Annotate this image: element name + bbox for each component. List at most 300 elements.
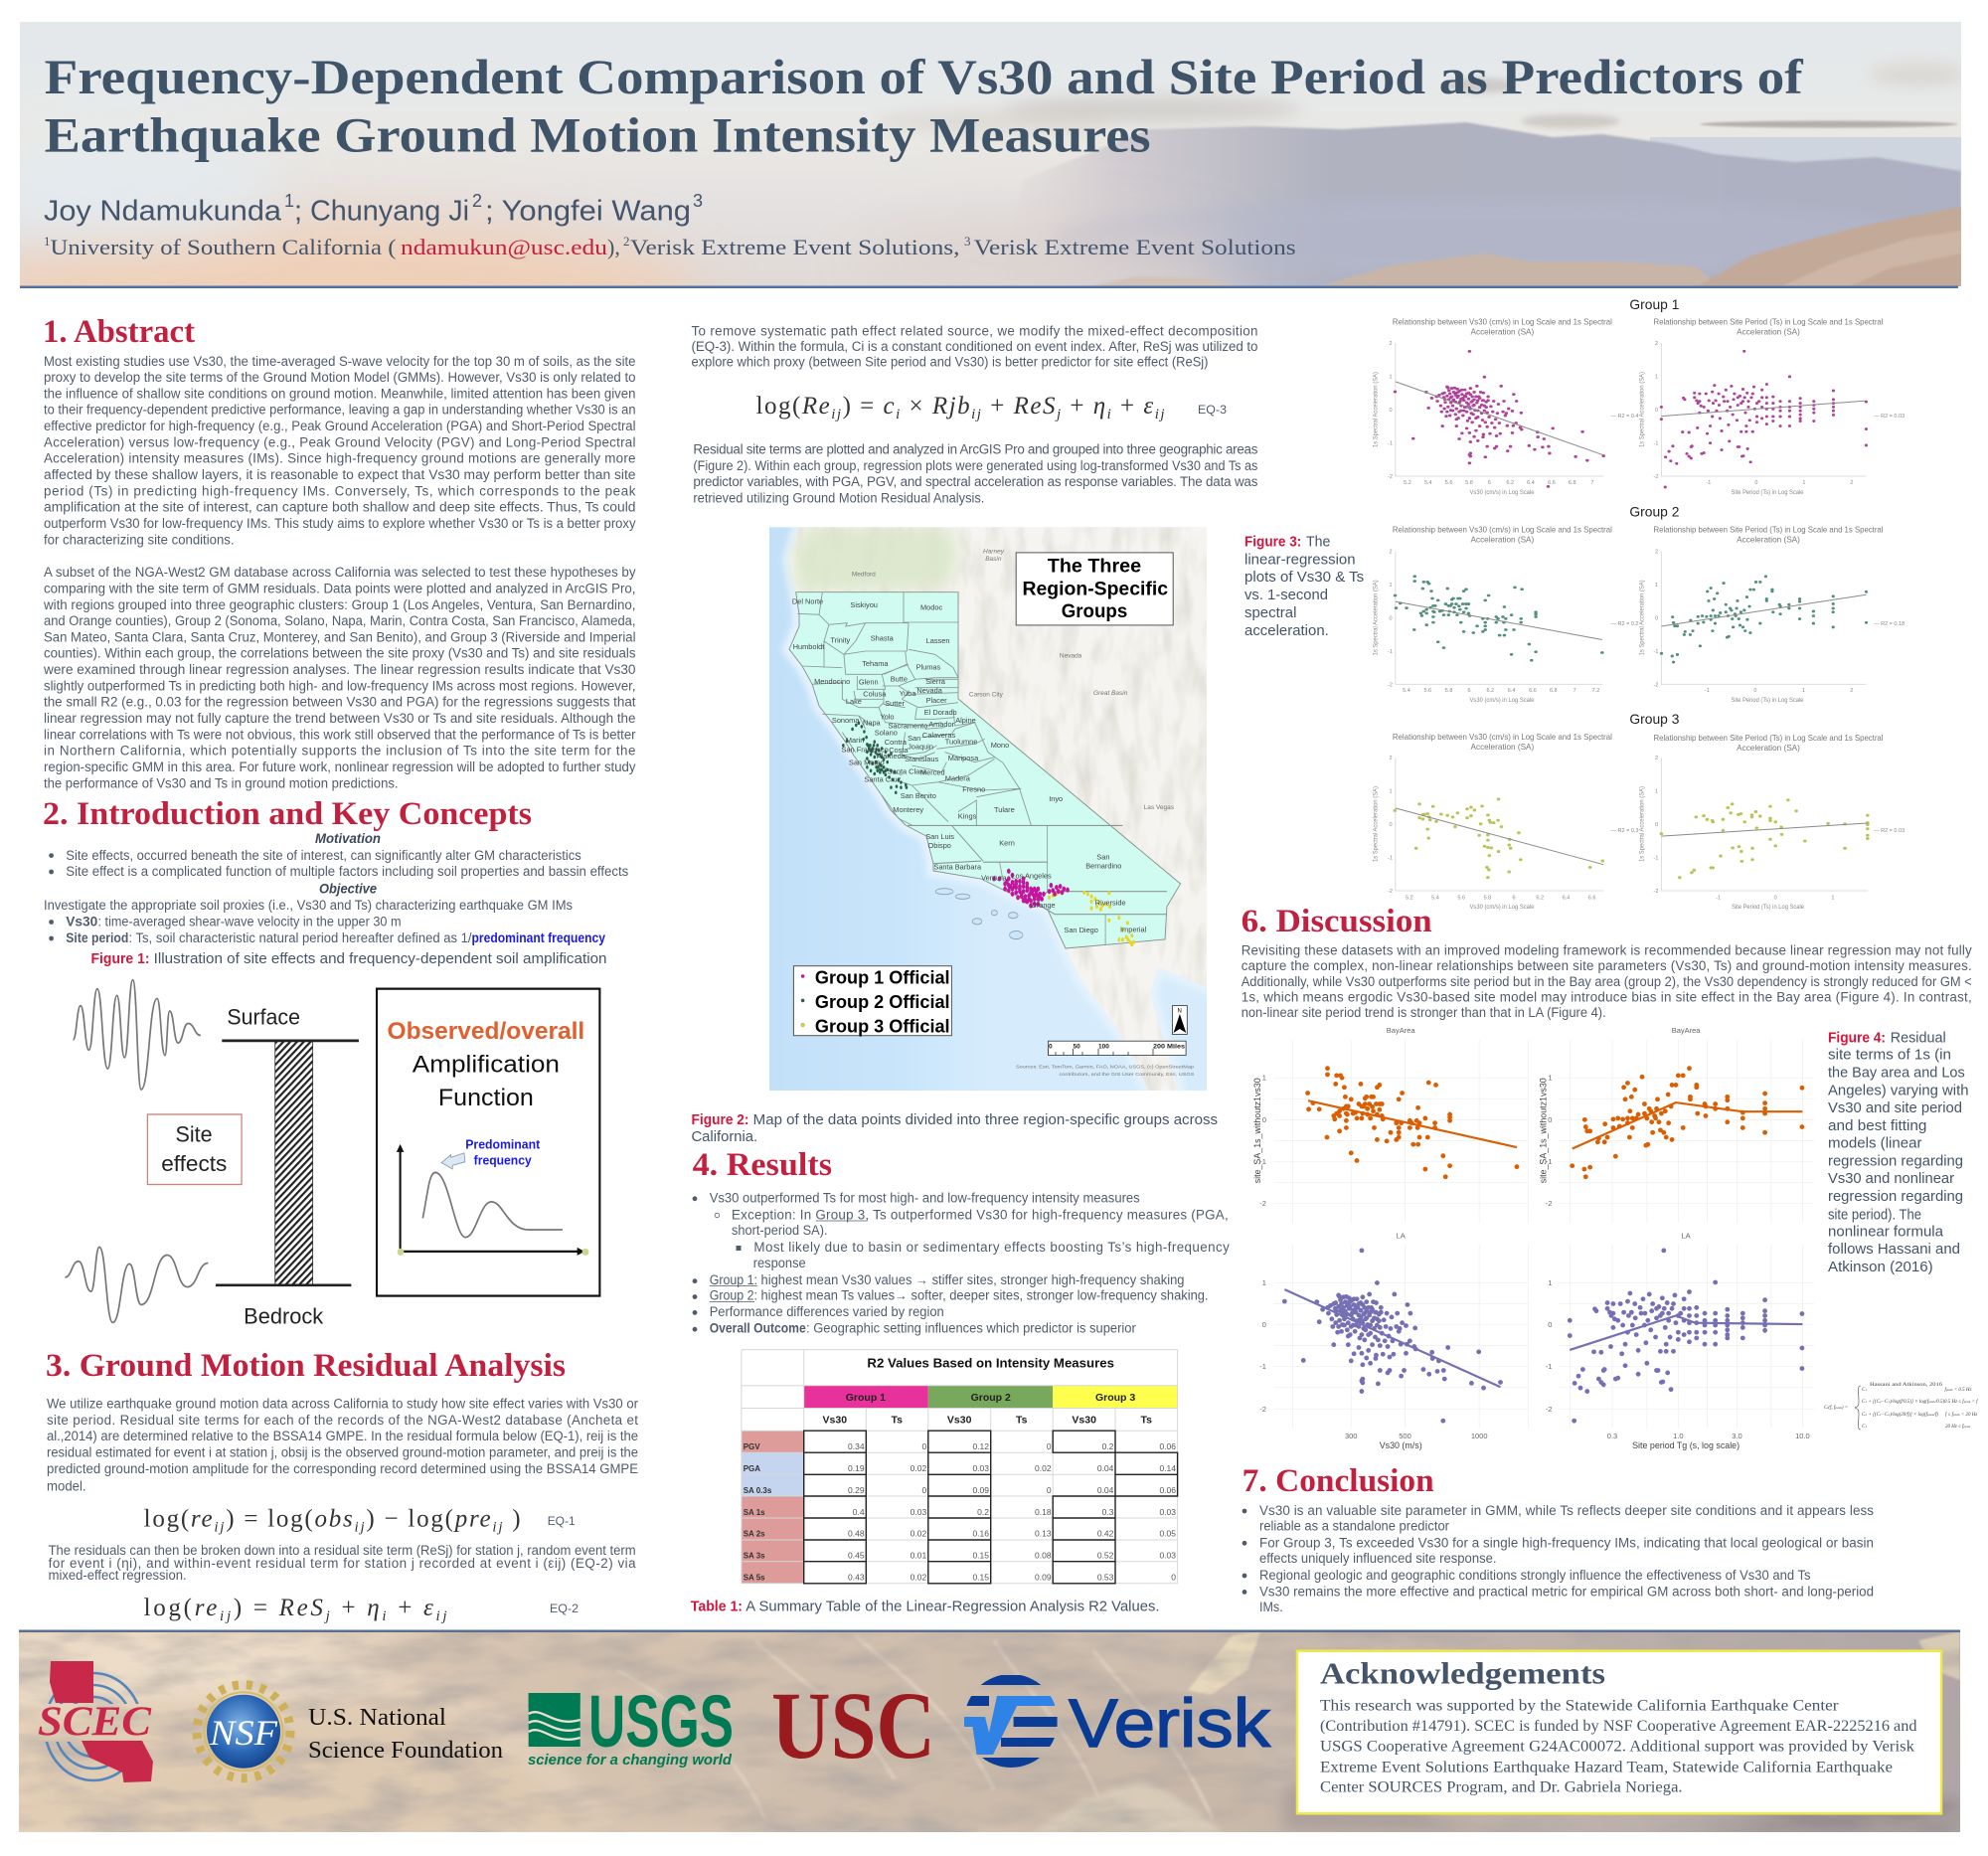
text block: results bullet list: short-period SA). [732,1223,827,1238]
map title box: Region-Specific [1022,579,1168,599]
equation 1: ) = log( [226,1506,313,1533]
logo: SCEC [38,1661,153,1782]
logo: NSF: Science Foundation [308,1738,503,1764]
affiliations: University of Southern California ( [50,235,396,259]
text block: conclusion bullets: reliable as a standalone predictor [1259,1519,1450,1534]
authors: Joy Ndamukunda [44,196,282,228]
text block: results bullet list: : Geographic setting influences which predictor is superior [806,1320,1136,1335]
figure 4 axis labels: 300 [1345,1432,1357,1440]
authors [44,191,703,228]
figure 4 axis labels: site_SA_1s_withoutz1vs30 [1252,1078,1263,1183]
chart: group 3 vs30: Vs30 (cm/s) in Log Scale [1469,904,1535,911]
chart: group 3 vs30: 2 [1390,756,1393,761]
equation 3: EQ-3 [1198,403,1227,417]
text block: objective: : time-averaged shear-wave velocity in the upper 30 m [97,915,402,929]
caption: figure 3: spectral [1244,605,1296,621]
chart: group 1 site period [1638,318,1905,496]
map labels: San Francisco [841,745,889,754]
amplification function box: Function [438,1084,534,1110]
chart: group 3 vs30: — R2 = 0.3 [1610,828,1638,834]
header banner [20,22,1961,288]
table values: 0.13 [1035,1529,1052,1539]
text block: conclusion bullets: Vs30 remains the more effective and practical metric for empirical GM across both short- and long-period [1259,1584,1874,1599]
chart: group 1 vs30: 7 [1590,480,1594,486]
panel: abstract [43,314,636,790]
table values: 0.48 [848,1529,865,1539]
data points: group 2 [843,723,907,792]
panel: acknowledgements [1297,1651,1941,1813]
figure 4 axis labels [1252,1026,1810,1451]
caption: figure 3: plots of Vs30 & Ts [1244,570,1364,586]
chart: group 3 vs30: 6 [1512,896,1516,902]
map labels: Kern [999,838,1015,847]
map legend: Group 3 Official [815,1017,950,1037]
chart: group 3 vs30: 6.6 [1588,896,1595,902]
chart: group 1 vs30 [1372,318,1638,496]
map labels: Santa Clara [888,766,927,775]
chart: bay area site period [1573,1069,1802,1177]
map labels: Sacramento [889,722,927,730]
table row labels: PGV [744,1442,760,1451]
chart: group 3 vs30: 6.2 [1536,896,1544,902]
equation 3: ij [1155,407,1165,422]
authors: 3 [693,191,703,211]
figure 4 axis labels: Vs30 (m/s) [1380,1440,1422,1451]
table values: 0.02 [911,1463,926,1473]
title: Frequency-Dependent Comparison of Vs30 and Site Period as Predictors of [45,49,1804,104]
chart: group 2 site period: — R2 = 0.18 [1874,621,1905,627]
map labels: San [1096,853,1109,862]
chart: group 1 vs30: Acceleration (SA) [1471,328,1535,336]
caption: figure 4: Vs30 and site period [1828,1100,1962,1116]
figure 4: residual site terms [1252,1026,1814,1451]
caption: figure 3 [1244,535,1364,639]
logo: Verisk: Verisk [1069,1685,1271,1762]
equation 3: + [1063,393,1091,420]
text block: conclusion bullets: For Group 3, Ts exceeded Vs30 for a single high-frequency IMs, indicating that local geological or basin [1259,1535,1874,1550]
county boundaries [797,592,1031,825]
figure 4 axis labels: -1 [1546,1157,1552,1166]
figure 4 axis labels: 0 [1548,1320,1552,1329]
table group headers: Group 2 [971,1392,1011,1404]
figure 4 axis labels: site_SA_1s_withoutz1vs30 [1539,1078,1549,1183]
map labels: Glenn [859,678,879,687]
text block: abstract paragraph 2: linear regression may not fully capture the trend between Vs30 or Ts and site residuals. Although the [44,711,636,726]
logo: USGS: USGS [588,1680,734,1763]
chart: group 3 site period: -1 [1716,896,1721,902]
logo: NSF: U.S. National [308,1705,446,1731]
affiliations: Verisk Extreme Event Solutions [974,235,1296,259]
chart: group 2 vs30: Vs30 (cm/s) in Log Scale [1469,697,1535,704]
text block: results bullet list: Overall Outcome [710,1320,806,1335]
map labels: Inyo [1049,794,1063,803]
chart: group 1 site period: 1 [1802,480,1805,486]
map labels: Nevada [1060,652,1082,660]
table group headers: Vs30 [947,1414,972,1426]
map labels: Colusa [863,689,887,698]
caption: figure 4 [1828,1030,1968,1275]
text block: discussion paragraph: Additionally, while Vs30 outperforms site period but in the Bay area (group 2), the Vs30 dependency is strongly reduced for GM < [1242,974,1972,989]
affiliations: 3 [964,234,970,249]
nonlinear formula: fpeak < 0.5 Hz [1944,1388,1971,1393]
authors: ; Yongfei Wang [485,196,691,228]
map scale bar: 0 [1049,1044,1053,1050]
map labels: Modoc [920,603,942,612]
table values: 0 [1171,1572,1176,1582]
text block: grouping method [693,441,1258,505]
chart: group 3 vs30: 0 [1390,822,1393,828]
table values: 0.15 [972,1551,989,1561]
table values: 0.01 [911,1551,926,1561]
logo: USGS [528,1680,734,1769]
text block: conclusion bullets: Regional geologic and geographic conditions strongly influence the effectiveness of Vs30 and Ts [1259,1568,1811,1583]
map scale bar: 50 [1074,1044,1080,1050]
table values: 0.43 [848,1572,865,1582]
chart: group 2 site period: 0 [1655,616,1658,622]
text block: decomposition [49,1543,636,1583]
text block: residual description: residual estimated for event i at station j, obsij is the observed ground-motion parameter, and preij is the [47,1445,638,1459]
text block: grouping method: Residual site terms are plotted and analyzed in ArcGIS Pro and grouped into three geographic areas [693,441,1258,456]
chart: group 1 site period: 2 [1850,480,1853,486]
equation 2: j [324,1608,330,1624]
soil column: Bedrock [244,1303,323,1329]
chart: group 2 site period [1638,525,1905,704]
table values: 0.19 [848,1463,865,1473]
nonlinear formula: C1 [1862,1425,1867,1430]
equation 3: c [884,393,895,420]
equation 3: log(Re [756,393,830,420]
caption: figure 4: regression regarding [1828,1154,1963,1170]
wave: bedrock motion [65,1247,208,1322]
affiliations: Verisk Extreme Event Solutions, [630,235,960,259]
equation 2: ij [220,1608,231,1624]
map labels: Harney [983,548,1005,555]
text block: abstract paragraph 1: amplification at the site of interest, can capture both shallow and deep site effects. Thus, Ts could [44,500,636,515]
equation 1 [144,1506,576,1536]
table group headers: Group 3 [1095,1392,1135,1404]
chart: group 3 vs30: 5.8 [1484,896,1491,902]
map labels: Amador [928,720,955,729]
table row labels: SA 0.3s [744,1486,772,1495]
text block: path effect [692,324,1258,370]
table values: 0.53 [1097,1572,1114,1582]
chart: group 2 vs30: -2 [1388,682,1393,688]
map labels: Sonoma [832,716,860,725]
chart: group 2 vs30: -1 [1388,649,1393,655]
map scale bar: 200 Miles [1153,1044,1185,1050]
chart: group 2 site period: Acceleration (SA) [1737,535,1800,545]
figure 4 axis labels: 1000 [1471,1432,1488,1440]
soil column: Surface [227,1004,300,1029]
authors: 2 [472,191,482,211]
footer banner [0,1625,1960,1832]
heading: introduction: 2. Introduction and Key Concepts [43,796,532,832]
equation 2: + [389,1595,420,1621]
map labels: Orange [1031,901,1056,910]
table values: 0.4 [853,1507,865,1517]
table values: 0 [921,1485,926,1495]
chart: group 2 site period: 1s Spectral Acceleration (SA) [1638,580,1646,655]
chart: group 3 vs30: 5.2 [1406,896,1413,902]
panel: mixed-effect decomposition [692,324,1258,505]
table group headers: Ts [1140,1414,1152,1426]
chart: group 3 vs30: 6.4 [1563,896,1570,902]
map labels: San [908,734,920,743]
text block: abstract paragraph 2 [43,565,636,790]
chart: group 2 vs30: Relationship between Vs30 (cm/s) in Log Scale and 1s Spectral [1393,525,1612,534]
map labels: Santa Cruz [864,775,902,783]
logo: Verisk [959,1675,1271,1768]
site effects box [147,1114,242,1185]
map labels: Stanislaus [905,755,939,763]
map labels: Tehama [862,659,889,668]
figure 4 axis labels: 3.0 [1732,1432,1742,1440]
text block: abstract paragraph 2: counties). Within each group, the correlations between the site proxy (Vs30 and Ts) and site residuals [44,646,636,661]
figure 4 axis labels: -2 [1259,1405,1266,1414]
caption: figure 4: Atkinson (2016) [1828,1260,1933,1275]
chart: group 1 site period: Site Period (Ts) in Log Scale [1732,489,1804,496]
equation 3: η [1093,393,1105,420]
figure 4 axis labels: 0 [1262,1115,1266,1124]
map labels: Siskiyou [850,600,878,609]
text block: abstract paragraph 2: comparing with the site term of GMM residuals. Data points were plotted and analyzed in ArcGIS Pro, [44,581,636,595]
chart: group 2 site period: 2 [1850,688,1853,694]
amplification function box: frequency [474,1153,532,1168]
text block: abstract paragraph 2: the performance of Vs30 and Ts in ground motion predictions. [44,775,398,790]
icon: north arrow [1173,1006,1187,1034]
table row labels: SA 1s [744,1508,765,1517]
figure 4 axis labels: 1 [1548,1074,1552,1083]
chart: group 1 vs30: 5.2 [1404,480,1411,486]
chart: group 3 vs30: 5.4 [1431,896,1439,902]
chart: la site period [1570,1251,1802,1421]
figure 4 axis labels: 1 [1262,1074,1266,1083]
panel: acknowledgements: Extreme Event Solutions Earthquake Hazard Team, Statewide California Earthquake [1320,1759,1893,1775]
panel: ground motion residual analysis [46,1348,639,1624]
map labels: Bernardino [1085,861,1121,870]
caption: figure 4: Vs30 and nonlinear [1828,1171,1954,1187]
title [45,49,1804,163]
heading: results: 4. Results [693,1147,832,1183]
figure 2: california map [769,527,1207,1091]
map labels: Napa [863,718,882,727]
text block: abstract paragraph 1: effective predictor for high-frequency (e.g., Peak Ground Acceleration (PGA) and Short-Period Spectral [44,419,636,433]
chart: group 2 vs30: 5.4 [1403,688,1410,694]
data points: group 1 [994,871,1068,906]
table values: 0.3 [1102,1507,1114,1517]
panel: discussion [1242,904,1972,1020]
table values: 0.03 [972,1463,989,1473]
text block: abstract paragraph 1: Most existing studies use Vs30, the time-averaged S-wave velocity for the top 30 m of soils, as the site [44,354,636,369]
map labels: Mariposa [948,754,979,762]
map labels: San Diego [1064,926,1098,934]
caption: figure 2: Map of the data points divided into three region-specific groups across [753,1112,1218,1128]
map labels: Trinity [830,636,851,645]
table group headers: Ts [892,1414,903,1426]
amplification function box: Observed/overall [388,1017,584,1044]
equation 1: ) [504,1506,521,1533]
table values: 0.06 [1159,1485,1176,1495]
text block: abstract paragraph 2: linear correlations with Ts were not obvious, this work still observed that the performance of Ts is better [44,727,636,742]
caption: figure 4: follows Hassani and [1828,1242,1960,1258]
chart: group 2 site period: 1 [1655,583,1658,589]
text block: grouping method: (Figure 2). Within each group, regression plots were generated using log-transformed Vs30 and Ts as [693,458,1258,473]
text block: discussion paragraph: Revisiting these datasets with an improved modeling framework is recommended because linear regression may not fully [1242,942,1972,957]
equation 3: ij [971,407,981,422]
table group headers: Vs30 [823,1414,847,1426]
chart: group 2 vs30 [1372,525,1638,704]
logo: USGS: science for a changing world [528,1753,733,1769]
chart: bay area vs30 [1308,1069,1517,1177]
chart: group 2 vs30: 1 [1390,583,1393,589]
chart: group 2 vs30: 7.2 [1592,688,1599,694]
chart: group 3 site period: -1 [1654,856,1658,862]
caption: table 1: A Summary Table of the Linear-Regression Analysis R2 Values. [746,1600,1159,1615]
logo: SCEC: SCEC [38,1700,152,1746]
text block: motivation [49,831,629,879]
chart: group 3 site period: 1 [1831,896,1834,902]
text block: abstract paragraph 2: were examined through linear regression analyses. The linear regression results indicate that Vs30 [43,662,636,677]
text block: results bullet list: response [753,1256,806,1270]
text block: abstract paragraph 1: the influence of shallow site conditions on ground motion. Meanwhile, limited attention has been given [44,386,636,401]
chart: group 2 vs30: 5.6 [1423,688,1431,694]
chart: group 3 site period: Site Period (Ts) in Log Scale [1732,904,1804,911]
text block: conclusion bullets: Vs30 is an valuable site parameter in GMM, while Ts reflects deeper site conditions and it appears less [1259,1503,1874,1518]
chart: group 1 vs30: 6 [1488,480,1491,486]
figure 4 axis labels: -2 [1546,1199,1552,1208]
text block: abstract paragraph 2: A subset of the NGA-West2 GM database across California was selected to test these hypotheses by [44,565,636,580]
map labels: San Mateo [849,759,885,767]
map legend [793,966,951,1037]
caption: figure 3: The [1306,535,1330,551]
chart: group 1 site period: Relationship between Site Period (Ts) in Log Scale and 1s Spectral [1654,318,1884,327]
chart: group 3 vs30: 5.6 [1457,896,1465,902]
caption: table 1: Table 1: [691,1600,743,1615]
map labels: Mono [991,741,1009,750]
map labels: El Dorado [924,708,957,717]
caption: figure 4: regression regarding [1828,1189,1963,1205]
heading: conclusion: 7. Conclusion [1242,1463,1434,1499]
caption: figure 4: the Bay area and Los [1828,1066,1965,1082]
map labels: Plumas [916,662,941,671]
map labels: Lake [846,697,862,706]
map labels: Merced [920,767,945,776]
table row labels: SA 3s [744,1552,765,1561]
figure 4 axis labels: 500 [1399,1432,1411,1440]
map labels: Humboldt [793,642,824,651]
text block: discussion paragraph: capture the complex, non-linear relationships between site parameters (Vs30, Ts) and ground-motion intensity measures. [1242,958,1972,973]
chart: group 2 vs30: 6.8 [1550,688,1558,694]
heading: abstract: 1. Abstract [43,314,195,350]
text block: residual description: model. [47,1479,86,1493]
chart: group 1 vs30: 5.6 [1445,480,1452,486]
nonlinear formula: 20 Hz ≤ fpeak [1945,1425,1971,1430]
chart: group 1 vs30: 6.8 [1569,480,1576,486]
authors: ; Chunyang Ji [294,196,469,228]
heading: discussion: 6. Discussion [1242,904,1432,939]
caption: figure 1: Illustration of site effects and frequency-dependent soil amplification [154,951,606,967]
caption: figure 4: site terms of 1s (in [1828,1048,1951,1064]
equation 1: log(re [144,1506,213,1533]
figure 4 axis labels: -2 [1546,1405,1552,1414]
equation 2: i [382,1608,387,1624]
chart: group 1 vs30: 1 [1390,375,1393,381]
text block: objective: Investigate the appropriate soil proxies (i.e., Vs30 and Ts) characterizing earthquake GM IMs [44,898,573,913]
map labels: Lassen [926,636,949,645]
map labels: Butte [891,674,908,684]
text block: objective [44,881,605,945]
map labels: Solano [875,729,898,738]
text block: motivation: Site effects, occurred beneath the site of interest, can significantly alter GM characteristics [66,848,581,863]
logo: NSF: NSF [209,1713,278,1753]
map labels: Riverside [1095,899,1126,907]
chart: group 1 site period: 2 [1655,341,1658,347]
chart: group 1 vs30: 6.6 [1548,480,1556,486]
equation 3: ) = [843,393,882,420]
chart: group 1 site period: -2 [1654,474,1658,480]
figure 4 axis labels: BayArea [1387,1026,1415,1035]
table highlighted cells [804,1431,1178,1584]
equation 2: ε [423,1595,433,1621]
icon: north arrow: N [1177,1008,1182,1014]
panel: acknowledgements: Center SOURCES Program, and Dr. Gabriela Noriega. [1320,1778,1683,1795]
caption: figure 4: Figure 4: [1828,1030,1886,1046]
chart: group 1 vs30: 6.2 [1506,480,1514,486]
text block: results bullet list: Performance differences varied by region [710,1304,944,1319]
text block: abstract paragraph 2: the small R2 (e.g., 0.03 for the regression between Vs30 and PGA) for the regressions suggests that [44,695,636,710]
figure 4 axis labels: 1 [1548,1278,1552,1287]
table values: 0.04 [1097,1463,1114,1473]
table values: 0.2 [1102,1441,1114,1451]
map title box [1016,553,1173,625]
panel: acknowledgements: This research was supported by the Statewide California Earthquake Center [1320,1698,1839,1715]
chart: group 3 site period: 2 [1655,756,1658,761]
text block: results bullet list: highest mean Ts values→ softer, deeper sites, stronger low-frequency shaking. [761,1288,1209,1303]
text block: results bullet list: Group 1: [710,1272,757,1287]
heading: residual analysis: 3. Ground Motion Residual Analysis [46,1348,566,1384]
table group headers: Vs30 [1072,1414,1096,1426]
map labels: Mendocino [814,677,850,686]
table values: 0.15 [972,1572,989,1582]
chart: group 1 site period: -1 [1654,441,1658,447]
chart: group 3 vs30: Acceleration (SA) [1471,743,1535,752]
site effects box: Site [176,1121,213,1147]
text block: abstract paragraph 2: region-specific GMM in this area. For future work, nonlinear regression will be adopted to further study [44,759,636,774]
map labels: Placer [926,696,947,705]
chart: group 3 site period: 1 [1655,789,1658,795]
figure 4 axis labels: -1 [1259,1157,1266,1166]
table group headers: Ts [1016,1414,1028,1426]
figure 1: site effects diagram [65,980,599,1329]
figure 4 axis labels: Site period Tg (s, log scale) [1632,1440,1740,1451]
chart: group 2 vs30: 6.2 [1486,688,1494,694]
text block: results bullet list: Exception: In Group 3, Ts outperformed Vs30 for high-frequency measures (PGA, [732,1207,1229,1222]
caption: figure 2 [692,1112,1218,1145]
amplification function box: Predominant [465,1137,540,1151]
nonlinear formula: C2 + [(C1−C2)/log(20/f)] × log(fpeak/f) [1862,1413,1938,1418]
equation 1: ij [492,1520,503,1536]
map labels: Fresno [962,785,985,794]
heading: group 3: Group 3 [1629,711,1680,727]
map labels: San Benito [901,791,936,800]
map labels: Kings [958,811,977,820]
data points: group 3 [1050,892,1134,944]
equation 1: ij [355,1520,365,1536]
text block: abstract paragraph 1: to their frequency-dependent predictive performance, leaving a gap in understanding whether Vs30 is an [44,403,636,418]
chart: group 3 vs30 [1372,733,1638,911]
table values: 0.42 [1097,1529,1114,1539]
map title box: Groups [1062,601,1127,622]
